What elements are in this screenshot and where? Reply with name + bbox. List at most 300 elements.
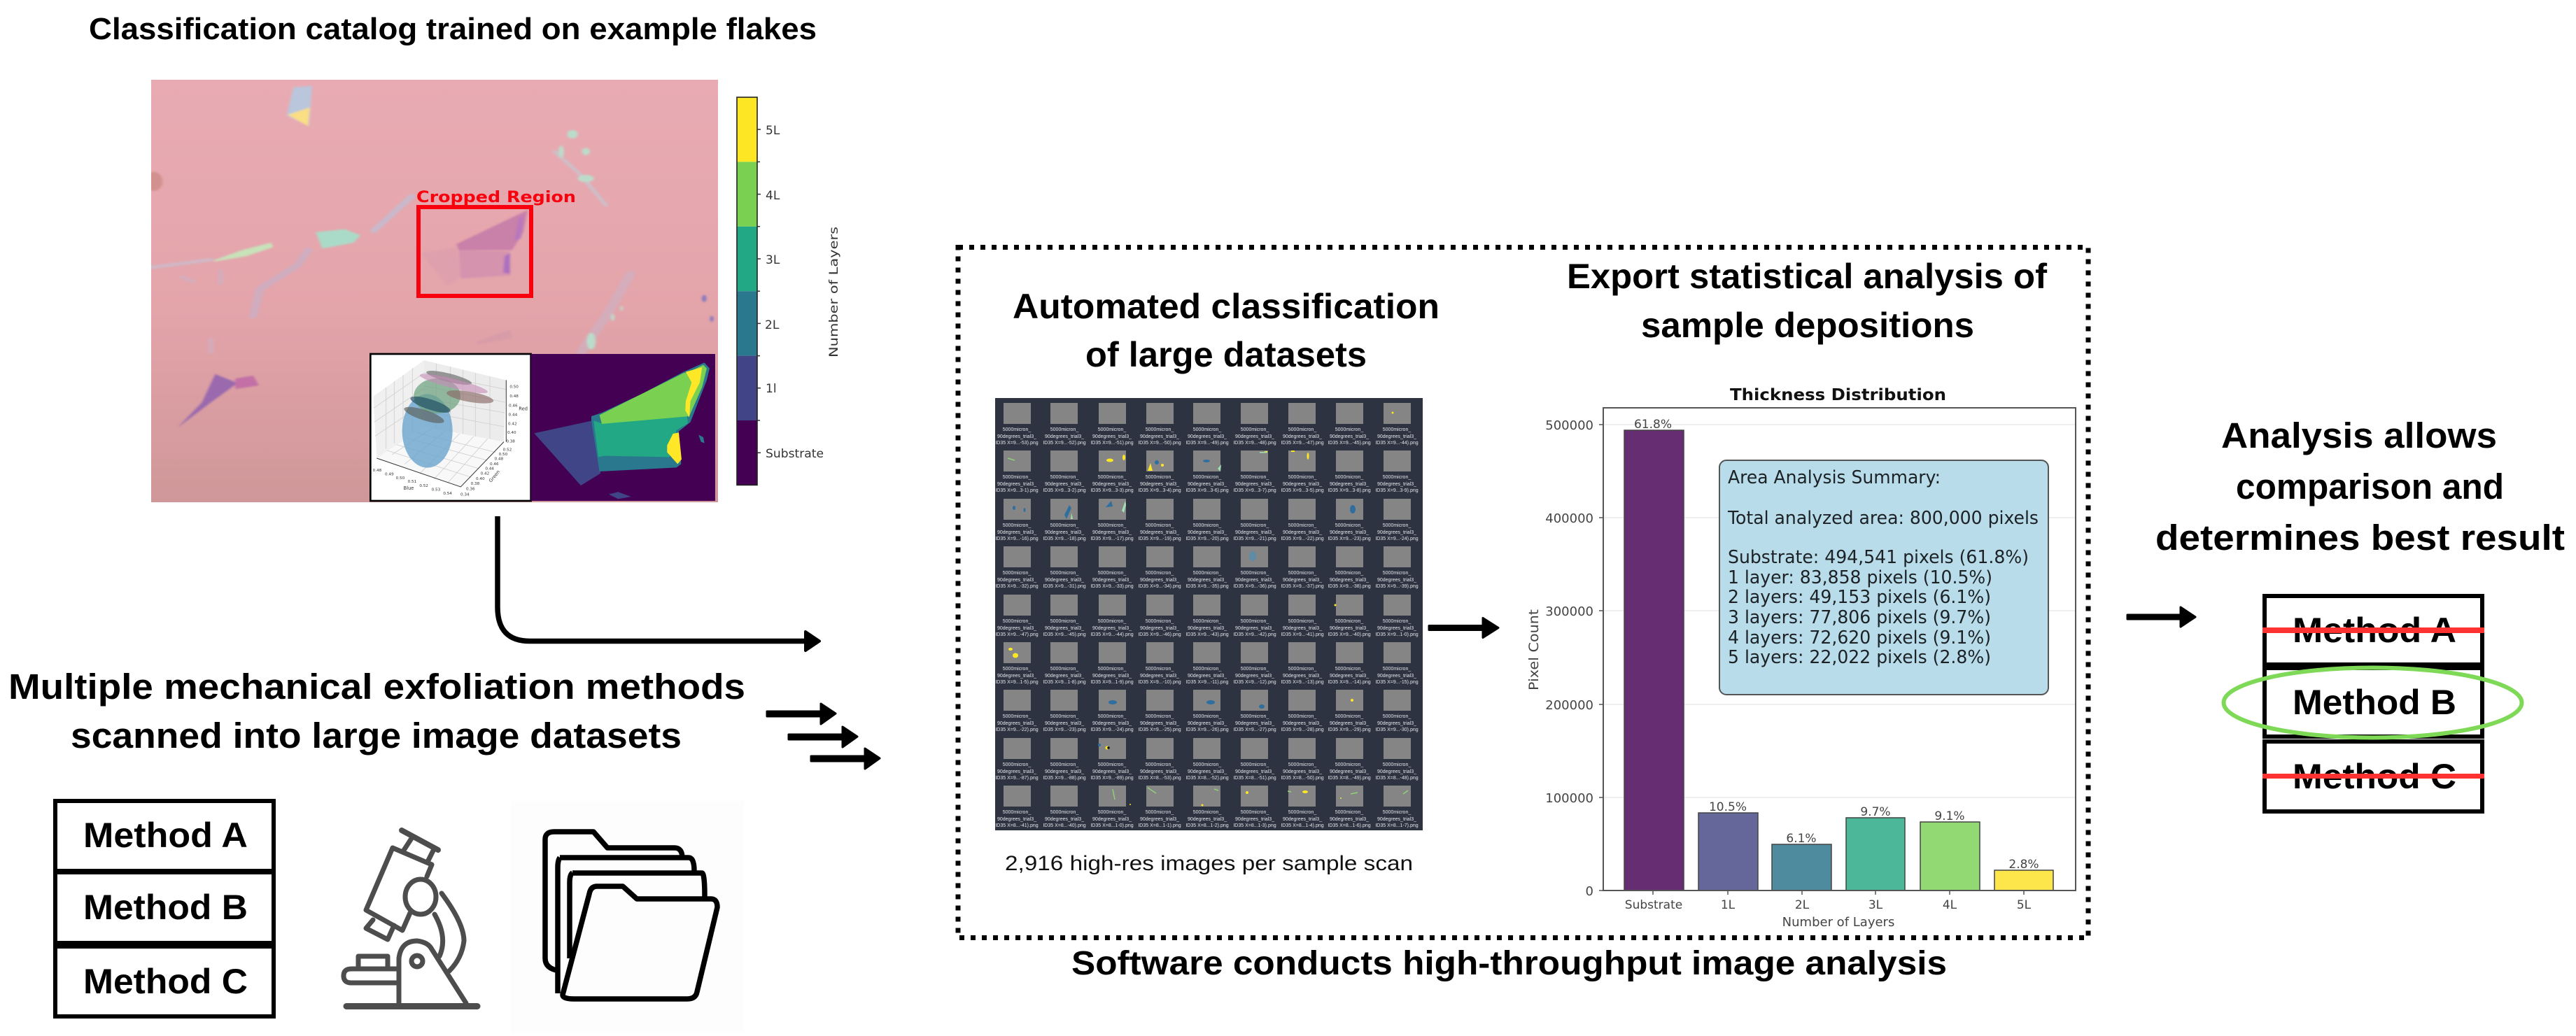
- thumbnail captions: 5000micron_: [1241, 427, 1269, 432]
- thumbnails: [1004, 403, 1411, 807]
- plot tick labels: 0.40: [507, 431, 516, 435]
- x axis labels: 2L: [1795, 898, 1810, 912]
- thumbnail captions: 90degrees_trial3_: [1235, 817, 1274, 822]
- summary box: 2 layers: 49,153 pixels (6.1%): [1728, 587, 1991, 608]
- thumbnail captions: 90degrees_trial3_: [1377, 530, 1416, 535]
- thumbnail captions: ID35 X=9...-48).png: [1233, 441, 1276, 446]
- y axis labels: [1545, 418, 1593, 899]
- bar chart: thickness distribution: Pixel Count: [1526, 609, 1542, 690]
- thumbnail captions: 90degrees_trial3_: [997, 769, 1036, 774]
- thumbnail captions: 5000micron_: [1050, 762, 1078, 767]
- thumbnail captions: 90degrees_trial3_: [1377, 626, 1416, 631]
- bars: [1624, 430, 2053, 890]
- thumbnail captions: 90degrees_trial3_: [1045, 482, 1084, 487]
- thumbnail captions: ID35 X=9...3-9).png: [1375, 488, 1419, 493]
- summary box: Substrate: 494,541 pixels (61.8%): [1728, 547, 2029, 568]
- chart title: Thickness Distribution: [1730, 386, 1946, 404]
- y axis labels: 300000: [1545, 604, 1593, 619]
- thumbnail captions: 90degrees_trial3_: [1283, 530, 1322, 535]
- thumbnail captions: 5000micron_: [1335, 427, 1363, 432]
- thumbnail captions: 90degrees_trial3_: [1330, 674, 1369, 679]
- thumbnail captions: ID35 X=9...-19).png: [1138, 537, 1181, 541]
- thumbnail captions: 90degrees_trial3_: [1140, 626, 1179, 631]
- thumbnail captions: 90degrees_trial3_: [1283, 674, 1322, 679]
- thumbnail captions: ID35 X=9...-47).png: [995, 632, 1039, 637]
- inset: layer classification mask: [531, 354, 715, 501]
- ellipsoids: [402, 368, 494, 468]
- thumbnail captions: 90degrees_trial3_: [1235, 578, 1274, 583]
- thumbnail captions: 5000micron_: [1335, 475, 1363, 480]
- x axis labels: 5L: [2017, 898, 2032, 912]
- thumbnail captions: 90degrees_trial3_: [1092, 578, 1132, 583]
- thumbnail captions: 5000micron_: [1335, 523, 1363, 528]
- thumbnail captions: ID35 X=9...3-6).png: [1185, 488, 1229, 493]
- thumbnail captions: 90degrees_trial3_: [1235, 434, 1274, 439]
- x axis labels: 1L: [1721, 898, 1736, 912]
- thumbnail captions: ID35 X=9...-25).png: [1138, 728, 1181, 732]
- thumbnail captions: 5000micron_: [1146, 427, 1174, 432]
- summary box: Total analyzed area: 800,000 pixels: [1727, 508, 2039, 529]
- thumbnail captions: 5000micron_: [1241, 571, 1269, 576]
- plot tick labels: 0.52: [419, 484, 428, 488]
- thumbnail captions: 5000micron_: [1098, 714, 1126, 719]
- thumbnail captions: 5000micron_: [1098, 762, 1126, 767]
- thumbnail captions: ID35 X=9...-30).png: [1375, 728, 1419, 732]
- thumbnail captions: 90degrees_trial3_: [1283, 434, 1322, 439]
- thumbnail captions: 5000micron_: [1241, 714, 1269, 719]
- plot tick labels: 0.51: [408, 480, 417, 484]
- arrows: three into dataset: [767, 704, 880, 769]
- thumbnail captions: ID35 X=8...-51).png: [1233, 776, 1276, 781]
- thumbnail captions: ID35 X=9...-89).png: [1090, 776, 1134, 781]
- thumbnail captions: 90degrees_trial3_: [1045, 769, 1084, 774]
- thumbnail captions: ID35 X=9...-47).png: [1281, 441, 1324, 446]
- thumbnail captions: 90degrees_trial3_: [1330, 626, 1369, 631]
- thumbnail captions: 5000micron_: [1288, 810, 1316, 815]
- thumbnail captions: ID35 X=9...1-8).png: [1043, 680, 1086, 685]
- thumbnail captions: 90degrees_trial3_: [1092, 721, 1132, 726]
- thumbnail captions: ID35 X=9...-31).png: [1043, 584, 1086, 589]
- thumbnail captions: ID35 X=9...-88).png: [1043, 776, 1086, 781]
- thumbnail captions: 5000micron_: [1146, 475, 1174, 480]
- thumbnail captions: ID35 X=9...3-4).png: [1138, 488, 1181, 493]
- heading: comparison: [2155, 416, 2565, 558]
- thumbnail captions: 5000micron_: [1146, 571, 1174, 576]
- thumbnail captions: 5000micron_: [1383, 714, 1411, 719]
- thumbnail captions: ID35 X=8...-52).png: [1185, 776, 1229, 781]
- thumbnail captions: 5000micron_: [1193, 810, 1221, 815]
- thumbnail captions: ID35 X=9...-12).png: [1233, 680, 1276, 685]
- thumbnail captions: ID35 X=9...-49).png: [1185, 441, 1229, 446]
- thumbnail captions: 90degrees_trial3_: [1140, 482, 1179, 487]
- thumbnail captions: 5000micron_: [1241, 619, 1269, 624]
- thumbnail captions: 5000micron_: [1383, 619, 1411, 624]
- thumbnail captions: ID35 X=9...-18).png: [1043, 537, 1086, 541]
- thumbnail captions: 90degrees_trial3_: [1330, 721, 1369, 726]
- thumbnail captions: ID35 X=9...-27).png: [1233, 728, 1276, 732]
- thumbnail captions: 90degrees_trial3_: [1330, 769, 1369, 774]
- plot tick labels: 0.48: [373, 469, 382, 473]
- heading: comparison: Analysis allows: [2221, 416, 2497, 455]
- thumbnail captions: 90degrees_trial3_: [1377, 578, 1416, 583]
- thumbnail captions: ID35 X=9...-11).png: [1186, 680, 1228, 685]
- method list: results: [2224, 596, 2522, 811]
- thumbnail captions: 5000micron_: [1383, 523, 1411, 528]
- inset: 3D gaussian ellipsoid plot: [370, 354, 531, 501]
- plot tick labels: 0.44: [509, 413, 518, 417]
- thumbnail captions: ID35 X=9...-38).png: [1328, 584, 1371, 589]
- thumbnail captions: ID35 X=8...-41).png: [995, 823, 1039, 828]
- thumbnail captions: 90degrees_trial3_: [1235, 482, 1274, 487]
- thumbnail captions: ID35 X=9...1-0).png: [1375, 632, 1419, 637]
- thumbnail captions: ID35 X=9...-24).png: [1375, 537, 1419, 541]
- y axis labels: 400000: [1545, 511, 1593, 526]
- thumbnail captions: ID35 X=9...3-2).png: [1043, 488, 1086, 493]
- thumbnail captions: ID35 X=9...-28).png: [1281, 728, 1324, 732]
- thumbnail captions: ID35 X=9...-36).png: [1233, 584, 1276, 589]
- thumbnail captions: 5000micron_: [1335, 667, 1363, 672]
- thumbnail captions: 90degrees_trial3_: [1283, 721, 1322, 726]
- thumbnail captions: 5000micron_: [1146, 619, 1174, 624]
- heading: export statistics: Export statistical analysis of: [1567, 257, 2047, 296]
- thumbnail captions: ID35 X=9...1-9).png: [1090, 680, 1134, 685]
- bar value labels: 9.1%: [1934, 809, 1965, 823]
- method list: left: Method C: [83, 962, 248, 1001]
- thumbnail captions: 90degrees_trial3_: [1235, 626, 1274, 631]
- plot tick labels: 0.42: [508, 422, 517, 426]
- thumbnail captions: 90degrees_trial3_: [1377, 817, 1416, 822]
- thumbnail captions: 5000micron_: [1050, 810, 1078, 815]
- thumbnail captions: 5000micron_: [1335, 714, 1363, 719]
- thumbnail captions: 5000micron_: [1193, 475, 1221, 480]
- colorbar: 2L: [765, 318, 780, 332]
- flake: central region: [456, 210, 528, 278]
- method list: left: Method A: [83, 816, 248, 855]
- thumbnail captions: 90degrees_trial3_: [1330, 434, 1369, 439]
- thumbnail captions: 90degrees_trial3_: [1188, 674, 1227, 679]
- plot tick labels: Red: [519, 406, 528, 412]
- thumbnail captions: 5000micron_: [1383, 427, 1411, 432]
- plot tick labels: 0.36: [466, 488, 475, 492]
- thumbnail captions: 90degrees_trial3_: [1235, 721, 1274, 726]
- heading: classification catalog: Classification catalog trained on example flakes: [89, 12, 817, 46]
- thumbnail captions: 5000micron_: [1288, 619, 1316, 624]
- thumbnail captions: 5000micron_: [1288, 475, 1316, 480]
- thumbnail captions: 5000micron_: [1146, 523, 1174, 528]
- thumbnail captions: ID35 X=9...-32).png: [995, 584, 1039, 589]
- thumbnail captions: 5000micron_: [1193, 714, 1221, 719]
- thumbnail captions: 5000micron_: [1241, 667, 1269, 672]
- bar value labels: 61.8%: [1634, 418, 1672, 432]
- colorbar: Substrate: [766, 447, 824, 461]
- thumbnail captions: 90degrees_trial3_: [1188, 482, 1227, 487]
- thumbnail captions: ID35 X=9...-51).png: [1090, 441, 1134, 446]
- thumbnail captions: 90degrees_trial3_: [997, 674, 1036, 679]
- thumbnail captions: 90degrees_trial3_: [1092, 482, 1132, 487]
- thumbnail captions: ID35 X=9...-10).png: [1138, 680, 1181, 685]
- thumbnail captions: 90degrees_trial3_: [1045, 434, 1084, 439]
- thumbnail captions: ID35 X=9...-45).png: [1328, 441, 1371, 446]
- summary box: 5 layers: 22,022 pixels (2.8%): [1728, 647, 1991, 668]
- thumbnail captions: 5000micron_: [1003, 475, 1031, 480]
- thumbnail captions: ID35 X=8...-50).png: [1281, 776, 1324, 781]
- strike: method A: [2262, 627, 2484, 633]
- thumbnail captions: 90degrees_trial3_: [1377, 482, 1416, 487]
- thumbnail captions: ID35 X=8...-40).png: [1043, 823, 1086, 828]
- thumbnail captions: 90degrees_trial3_: [997, 578, 1036, 583]
- thumbnail captions: ID35 X=9...-52).png: [1043, 441, 1086, 446]
- thumbnail captions: 5000micron_: [1288, 714, 1316, 719]
- method list: left: Method B: [83, 888, 248, 927]
- thumbnail captions: 5000micron_: [1050, 571, 1078, 576]
- thumbnail captions: ID35 X=9...-17).png: [1090, 537, 1134, 541]
- thumbnail captions: ID35 X=9...-37).png: [1281, 584, 1324, 589]
- thumbnail captions: 5000micron_: [1098, 427, 1126, 432]
- thumbnail captions: 5000micron_: [1098, 810, 1126, 815]
- thumbnail captions: ID35 X=9...3-1).png: [995, 488, 1039, 493]
- plot tick labels: [373, 385, 528, 497]
- thumbnail captions: ID35 X=9...-16).png: [995, 537, 1039, 541]
- plot tick labels: 0.46: [490, 462, 499, 467]
- thumbnail captions: 90degrees_trial3_: [1140, 530, 1179, 535]
- thumbnail captions: 5000micron_: [1193, 619, 1221, 624]
- caption: images per scan: 2,916 high-res images per sample scan: [1005, 852, 1413, 875]
- thumbnail captions: ID35 X=9...-22).png: [1281, 537, 1324, 541]
- thumbnail captions: 5000micron_: [1098, 667, 1126, 672]
- thumbnail captions: ID35 X=8...1-1).png: [1138, 823, 1181, 828]
- thumbnail captions: ID35 X=9...-13).png: [1281, 680, 1324, 685]
- thumbnail captions: 90degrees_trial3_: [1092, 530, 1132, 535]
- thumbnail captions: 90degrees_trial3_: [1045, 674, 1084, 679]
- thumbnail captions: 90degrees_trial3_: [1377, 769, 1416, 774]
- heading: automated classification: Automated classification: [1013, 287, 1440, 326]
- icon: microscope: [344, 830, 477, 1006]
- thumbnail captions: ID35 X=9...3-5).png: [1281, 488, 1324, 493]
- colorbar: [737, 97, 841, 485]
- panel: thumbnail grid of image dataset: [995, 398, 1423, 830]
- y axis labels: 100000: [1545, 791, 1593, 806]
- thumbnail captions: ID35 X=9...-53).png: [995, 441, 1039, 446]
- heading: automated classification: [1013, 287, 1440, 374]
- thumbnail captions: 5000micron_: [1335, 762, 1363, 767]
- thumbnail captions: 90degrees_trial3_: [1188, 817, 1227, 822]
- thumbnail captions: ID35 X=9...-14).png: [1328, 680, 1371, 685]
- thumbnail captions: 5000micron_: [1098, 619, 1126, 624]
- thumbnail captions: 5000micron_: [1146, 714, 1174, 719]
- method list: results: Method C: [2293, 757, 2456, 796]
- thumbnail captions: 90degrees_trial3_: [1188, 721, 1227, 726]
- thumbnail captions: 90degrees_trial3_: [1140, 817, 1179, 822]
- thumbnail captions: 5000micron_: [1288, 667, 1316, 672]
- summary box: 4 layers: 72,620 pixels (9.1%): [1728, 627, 1991, 648]
- strike: method C: [2262, 774, 2484, 779]
- thumbnail captions: 5000micron_: [1146, 810, 1174, 815]
- plot tick labels: Green: [488, 469, 501, 483]
- thumbnail captions: ID35 X=9...-33).png: [1090, 584, 1134, 589]
- bar value labels: 9.7%: [1860, 805, 1891, 819]
- bar chart: thickness distribution: Number of Layers: [1782, 915, 1894, 930]
- thumbnail captions: ID35 X=8...1-3).png: [1233, 823, 1276, 828]
- thumbnail captions: 5000micron_: [1146, 762, 1174, 767]
- thumbnail captions: 90degrees_trial3_: [1283, 626, 1322, 631]
- thumbnail captions: ID35 X=9...-41).png: [1281, 632, 1324, 637]
- thumbnail speckles: [1008, 411, 1408, 806]
- thumbnail captions: 90degrees_trial3_: [1283, 769, 1322, 774]
- thumbnail captions: ID35 X=9...-39).png: [1375, 584, 1419, 589]
- thumbnail captions: 5000micron_: [1241, 762, 1269, 767]
- thumbnail captions: 5000micron_: [1050, 667, 1078, 672]
- method list: results: Method A: [2293, 611, 2456, 650]
- plot tick labels: 0.38: [471, 482, 480, 486]
- bar value labels: 2.8%: [2008, 858, 2039, 872]
- thumbnail captions: ID35 X=8...-53).png: [1138, 776, 1181, 781]
- panel: flake microscope image: [145, 80, 718, 502]
- thumbnail captions: 5000micron_: [1193, 523, 1221, 528]
- thumbnail captions: ID35 X=9...-15).png: [1375, 680, 1419, 685]
- thumbnail captions: 90degrees_trial3_: [1377, 674, 1416, 679]
- colorbar: 1l: [766, 382, 777, 396]
- colorbar: 4L: [766, 189, 780, 203]
- heading: comparison: comparison and: [2236, 467, 2504, 506]
- thumbnail captions: ID35 X=9...-87).png: [995, 776, 1039, 781]
- cropped region box: Cropped Region: [416, 189, 576, 206]
- plot tick labels: Blue: [404, 485, 414, 491]
- plot tick labels: 0.40: [476, 477, 485, 481]
- thumbnail captions: 5000micron_: [1098, 523, 1126, 528]
- thumbnail captions: 90degrees_trial3_: [1188, 434, 1227, 439]
- thumbnail captions: [995, 427, 1419, 828]
- thumbnail captions: 90degrees_trial3_: [1235, 769, 1274, 774]
- thumbnail captions: 90degrees_trial3_: [1092, 626, 1132, 631]
- cropped region box: [416, 189, 576, 296]
- heading: automated classification: of large datasets: [1085, 335, 1367, 374]
- thumbnail captions: 5000micron_: [1003, 427, 1031, 432]
- plot tick labels: 0.53: [432, 488, 441, 492]
- thumbnail captions: 5000micron_: [1050, 475, 1078, 480]
- thumbnail captions: 90degrees_trial3_: [1377, 434, 1416, 439]
- thumbnail captions: 5000micron_: [1050, 714, 1078, 719]
- thumbnail captions: 90degrees_trial3_: [1092, 674, 1132, 679]
- thumbnail captions: 90degrees_trial3_: [1045, 626, 1084, 631]
- thumbnail captions: ID35 X=9...-40).png: [1328, 632, 1371, 637]
- colorbar: 5L: [766, 124, 780, 138]
- thumbnail captions: 90degrees_trial3_: [1140, 434, 1179, 439]
- arrow: to results: [2127, 607, 2195, 627]
- thumbnail captions: ID35 X=9...-50).png: [1138, 441, 1181, 446]
- thumbnail captions: 90degrees_trial3_: [997, 530, 1036, 535]
- thumbnail captions: 5000micron_: [1193, 762, 1221, 767]
- plot tick labels: 0.46: [509, 404, 518, 408]
- thumbnail captions: 90degrees_trial3_: [997, 434, 1036, 439]
- summary box: 3 layers: 77,806 pixels (9.7%): [1728, 607, 1991, 628]
- bar chart: thickness distribution: [1526, 386, 2076, 930]
- y axis labels: 500000: [1545, 418, 1593, 433]
- thumbnail captions: ID35 X=9...-43).png: [1185, 632, 1229, 637]
- thumbnail captions: 5000micron_: [1335, 810, 1363, 815]
- x axis labels: 4L: [1943, 898, 1957, 912]
- plot tick labels: 0.44: [485, 467, 494, 471]
- thumbnail captions: 5000micron_: [1288, 762, 1316, 767]
- plot tick labels: 0.38: [506, 440, 515, 444]
- thumbnail captions: ID35 X=9...-20).png: [1185, 537, 1229, 541]
- thumbnail captions: 5000micron_: [1241, 810, 1269, 815]
- bar value labels: 6.1%: [1786, 832, 1817, 846]
- method list: left: [55, 801, 274, 1016]
- thumbnail captions: 5000micron_: [1003, 619, 1031, 624]
- thumbnail captions: ID35 X=8...1-6).png: [1328, 823, 1371, 828]
- thumbnail captions: 90degrees_trial3_: [1140, 769, 1179, 774]
- thumbnail captions: ID35 X=8...1-0).png: [1090, 823, 1134, 828]
- flake: top yellow: [287, 86, 312, 126]
- thumbnail captions: 90degrees_trial3_: [1330, 817, 1369, 822]
- thumbnail captions: 90degrees_trial3_: [1330, 482, 1369, 487]
- thumbnail captions: 5000micron_: [1050, 427, 1078, 432]
- summary box: [1719, 460, 2048, 695]
- thumbnail captions: 90degrees_trial3_: [1377, 721, 1416, 726]
- thumbnail captions: 5000micron_: [1098, 571, 1126, 576]
- plot tick labels: 0.49: [385, 472, 394, 476]
- thumbnail captions: 5000micron_: [1193, 427, 1221, 432]
- thumbnail captions: 5000micron_: [1241, 523, 1269, 528]
- thumbnail captions: 5000micron_: [1383, 475, 1411, 480]
- thumbnail captions: 90degrees_trial3_: [1045, 530, 1084, 535]
- thumbnail captions: ID35 X=8...-48).png: [1375, 776, 1419, 781]
- thumbnail captions: ID35 X=9...-22).png: [995, 728, 1039, 732]
- plot tick labels: 0.50: [509, 385, 519, 390]
- colorbar label: Number of Layers: [827, 227, 841, 357]
- thumbnail captions: 5000micron_: [1003, 571, 1031, 576]
- thumbnail captions: ID35 X=9...1-5).png: [995, 680, 1039, 685]
- thumbnail captions: 90degrees_trial3_: [1235, 674, 1274, 679]
- thumbnail captions: 90degrees_trial3_: [997, 721, 1036, 726]
- plot tick labels: 0.34: [460, 492, 470, 497]
- thumbnail captions: ID35 X=9...-21).png: [1233, 537, 1276, 541]
- x axis labels: [1625, 898, 2032, 912]
- plot tick labels: 0.52: [503, 448, 512, 452]
- heading: exfoliation methods: Multiple mechanical exfoliation methods: [8, 667, 745, 707]
- thumbnail captions: 5000micron_: [1288, 523, 1316, 528]
- thumbnail captions: 5000micron_: [1003, 810, 1031, 815]
- thumbnail captions: 90degrees_trial3_: [1283, 482, 1322, 487]
- bar value labels: 10.5%: [1709, 800, 1747, 814]
- thumbnail captions: 5000micron_: [1098, 475, 1126, 480]
- thumbnail captions: 90degrees_trial3_: [1045, 578, 1084, 583]
- method list: results: Method B: [2293, 683, 2456, 722]
- heading: exfoliation methods: [8, 667, 745, 755]
- thumbnail captions: ID35 X=9...-42).png: [1233, 632, 1276, 637]
- thumbnail captions: 90degrees_trial3_: [1188, 578, 1227, 583]
- thumbnail captions: ID35 X=9...3-8).png: [1328, 488, 1371, 493]
- thumbnail captions: ID35 X=8...-49).png: [1328, 776, 1371, 781]
- thumbnail captions: ID35 X=9...-34).png: [1138, 584, 1181, 589]
- thumbnail captions: ID35 X=9...-45).png: [1043, 632, 1086, 637]
- panel: dotted software box: [958, 248, 2088, 937]
- thumbnail captions: 5000micron_: [1383, 762, 1411, 767]
- thumbnail captions: 90degrees_trial3_: [1283, 817, 1322, 822]
- heading: export statistics: sample depositions: [1641, 306, 1974, 345]
- thumbnail captions: 90degrees_trial3_: [1092, 817, 1132, 822]
- thumbnail captions: 90degrees_trial3_: [1330, 530, 1369, 535]
- thumbnail captions: 90degrees_trial3_: [997, 482, 1036, 487]
- thumbnail captions: 5000micron_: [1288, 571, 1316, 576]
- thumbnail captions: 5000micron_: [1003, 714, 1031, 719]
- thumbnail captions: 5000micron_: [1241, 475, 1269, 480]
- flake: lower-left purple: [177, 374, 259, 428]
- thumbnail captions: ID35 X=9...-46).png: [1138, 632, 1181, 637]
- plot tick labels: 0.48: [509, 395, 519, 399]
- plot tick labels: 0.50: [499, 453, 508, 457]
- thumbnail captions: 5000micron_: [1288, 427, 1316, 432]
